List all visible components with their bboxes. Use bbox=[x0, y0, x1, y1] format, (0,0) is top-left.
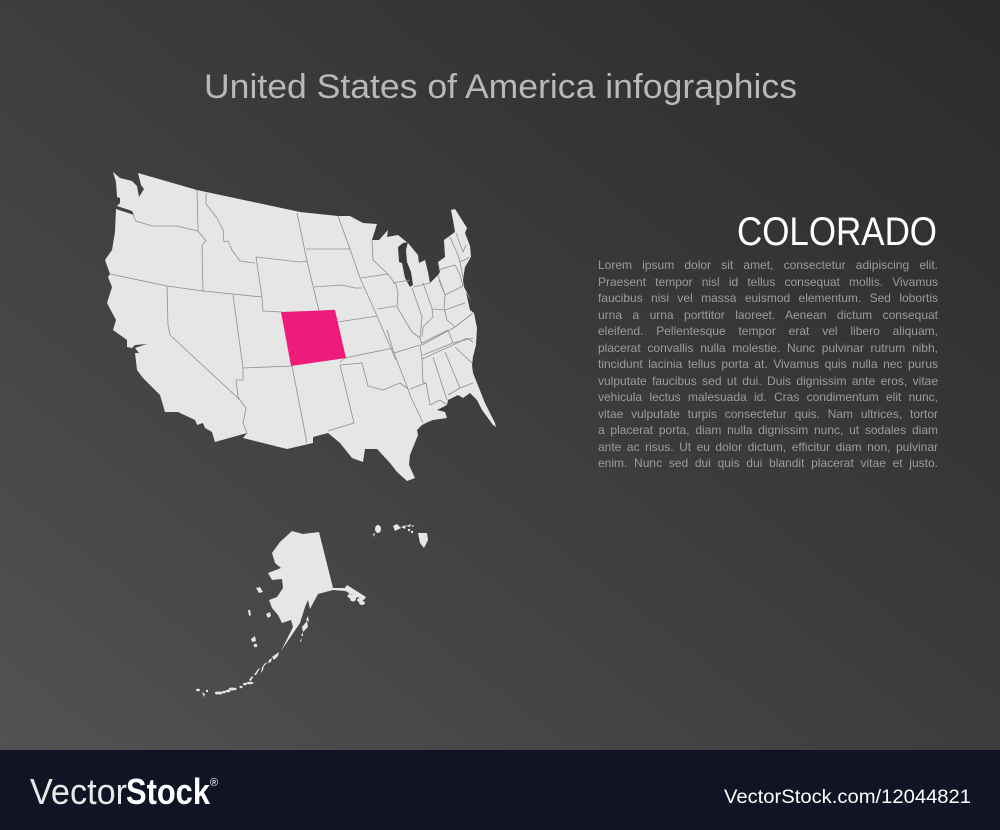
body text: vitae vulputate turpis consectetur quis. Nam ultrices, tortor bbox=[598, 406, 938, 420]
body text: eleifend. Pellentesque tempor erat vel libero aliquam, bbox=[598, 324, 938, 338]
body text: urna a urna porttitor laoreet. Aenean dictum consequat bbox=[598, 308, 938, 322]
body text: ante ac risus. Ut eu dolor dictum, efficitur diam non, pulvinar bbox=[598, 440, 938, 454]
Lake Michigan bbox=[398, 242, 413, 287]
body text: vulputate faucibus sed ut dui. Duis dignissim ante eros, vitae bbox=[598, 374, 938, 388]
body text: faucibus nisi vel massa euismod elementum. Sed lobortis bbox=[598, 291, 938, 305]
body text bbox=[598, 258, 938, 470]
body text: Lorem ipsum dolor sit amet, consectetur adipiscing elit. bbox=[598, 258, 938, 272]
Alaska panhandle islands bbox=[348, 590, 365, 605]
body text: Praesent tempor nisl id tellus consequat mollis. Vivamus bbox=[598, 274, 938, 288]
body text: vehicula lectus malesuada id. Cras condimentum elit nunc, bbox=[598, 390, 938, 404]
body text: enim. Nunc sed dui quis dui blandit placerat vitae et justo. bbox=[598, 456, 938, 470]
map: Alaska bbox=[196, 531, 366, 697]
title: United States of America infographics bbox=[204, 68, 797, 106]
land outline bbox=[105, 172, 496, 481]
map: contiguous United States bbox=[105, 172, 496, 481]
state heading: COLORADO bbox=[737, 210, 937, 254]
body text: placerat convallis nulla molestie. Nunc pulvinar rutrum nibh, bbox=[598, 340, 938, 354]
body text: a placerat porta, diam nulla dignissim nunc, ut sodales diam bbox=[598, 423, 938, 437]
footer logo: Stock bbox=[126, 771, 211, 812]
footer logo bbox=[30, 771, 218, 812]
footer logo: Vector bbox=[30, 771, 127, 812]
footer logo: ® bbox=[210, 777, 218, 789]
footer band bbox=[0, 750, 1000, 830]
Aleutian and coastal islands bbox=[196, 587, 309, 697]
highlighted state: Colorado bbox=[281, 310, 346, 366]
body text: tincidunt lacinia tellus porta at. Vivamus quis nulla nec purus bbox=[598, 357, 938, 371]
footer image id: VectorStock.com/12044821 bbox=[724, 787, 971, 808]
map: Hawaii bbox=[373, 524, 428, 548]
state borders bbox=[110, 190, 473, 443]
